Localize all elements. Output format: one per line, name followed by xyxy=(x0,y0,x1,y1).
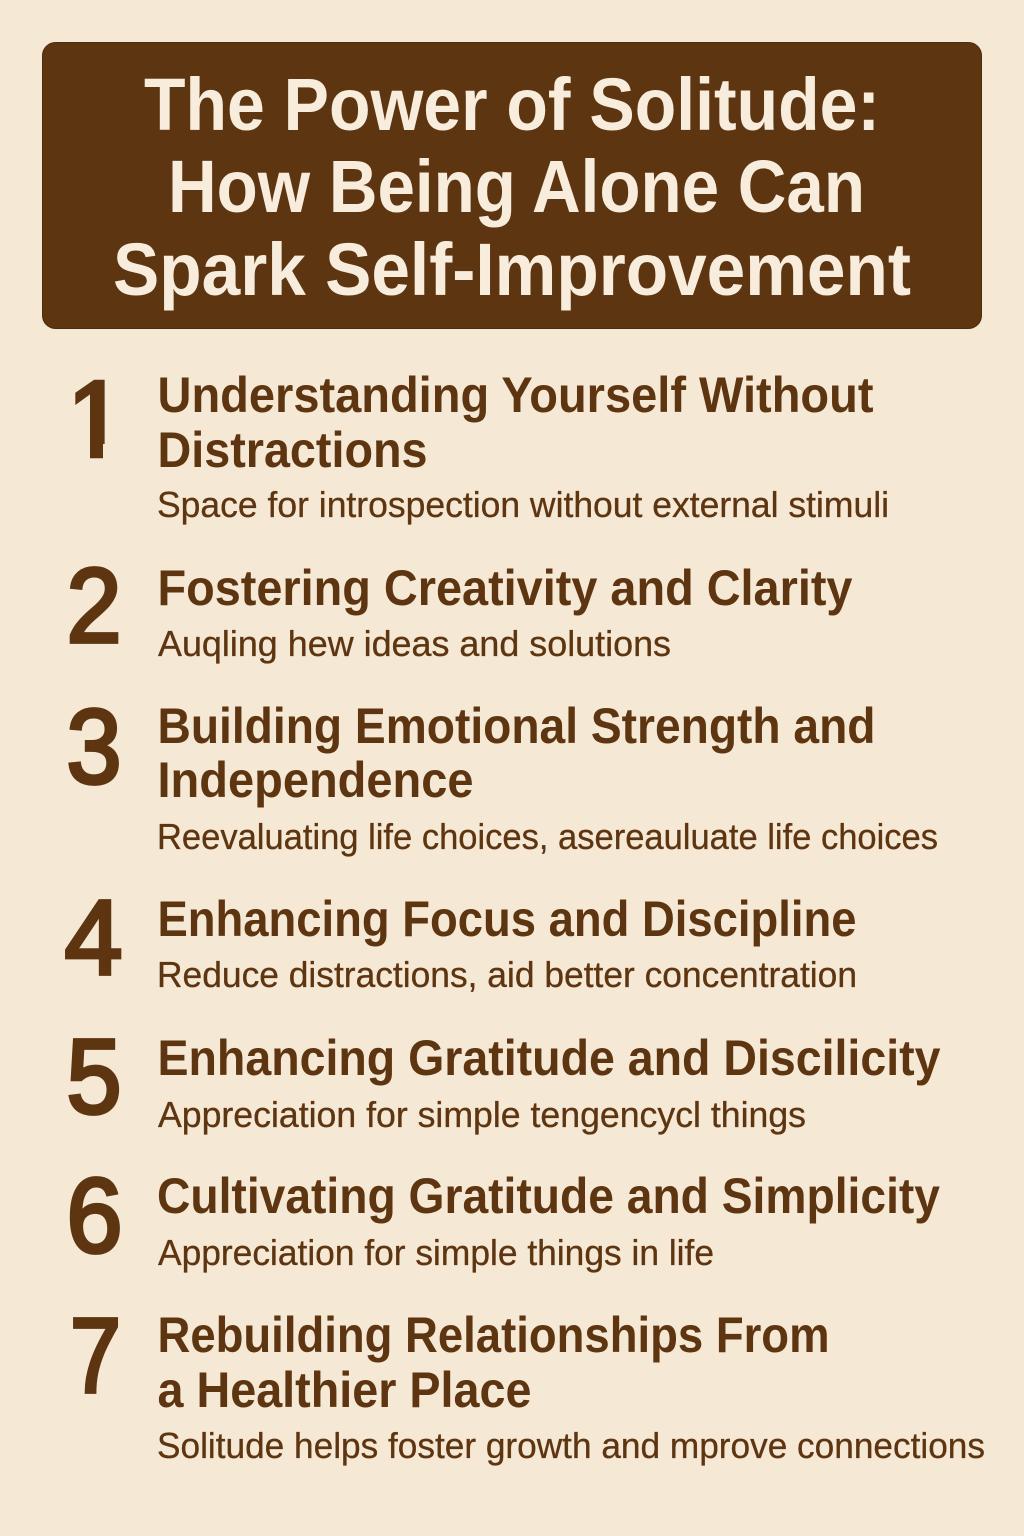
item 5: Appreciation for simple tengencycl things xyxy=(158,1094,806,1135)
title banner xyxy=(42,42,982,328)
item 3: Building Emotional Strength and xyxy=(158,698,876,754)
item 4: Enhancing Focus and Discipline xyxy=(158,891,856,947)
item 6: 6 xyxy=(66,1157,122,1275)
item 7: Rebuilding Relationships From xyxy=(158,1307,830,1363)
item 6: Cultivating Gratitude and Simplicity xyxy=(157,1168,940,1224)
item 4: 4 xyxy=(64,879,122,997)
item 6 xyxy=(66,1157,940,1275)
item 4: Reduce distractions, aid better concentration xyxy=(157,954,857,995)
item 1: Space for introspection without external stimuli xyxy=(157,484,889,525)
item 7: a Healthier Place xyxy=(158,1362,532,1418)
item 2 xyxy=(66,547,853,665)
item 6: Appreciation for simple things in life xyxy=(158,1232,714,1273)
title: Spark Self-Improvement xyxy=(113,228,911,311)
item 5: 5 xyxy=(66,1018,122,1136)
item 3 xyxy=(66,688,938,857)
item 1: Distractions xyxy=(158,422,428,478)
item 7: Solitude helps foster growth and mprove connections xyxy=(157,1425,985,1466)
item 3: Independence xyxy=(158,752,474,808)
item 5 xyxy=(66,1018,941,1136)
title xyxy=(113,63,911,311)
item 7 xyxy=(70,1297,985,1466)
title: The Power of Solitude: xyxy=(144,63,880,146)
item 5: Enhancing Gratitude and Discilicity xyxy=(158,1030,941,1086)
item 2: Fostering Creativity and Clarity xyxy=(158,560,853,616)
item 1: Understanding Yourself Without xyxy=(158,367,874,423)
item 1: 1 xyxy=(66,358,127,481)
item 4 xyxy=(64,879,857,997)
item 2: 2 xyxy=(66,547,122,665)
item 7: 7 xyxy=(70,1297,121,1415)
item 3: 3 xyxy=(66,688,122,806)
item 3: Reevaluating life choices, asereauluate life choices xyxy=(157,816,938,857)
item 1 xyxy=(55,358,889,525)
title: How Being Alone Can xyxy=(168,145,865,228)
item 2: Auqling hew ideas and solutions xyxy=(158,623,671,664)
